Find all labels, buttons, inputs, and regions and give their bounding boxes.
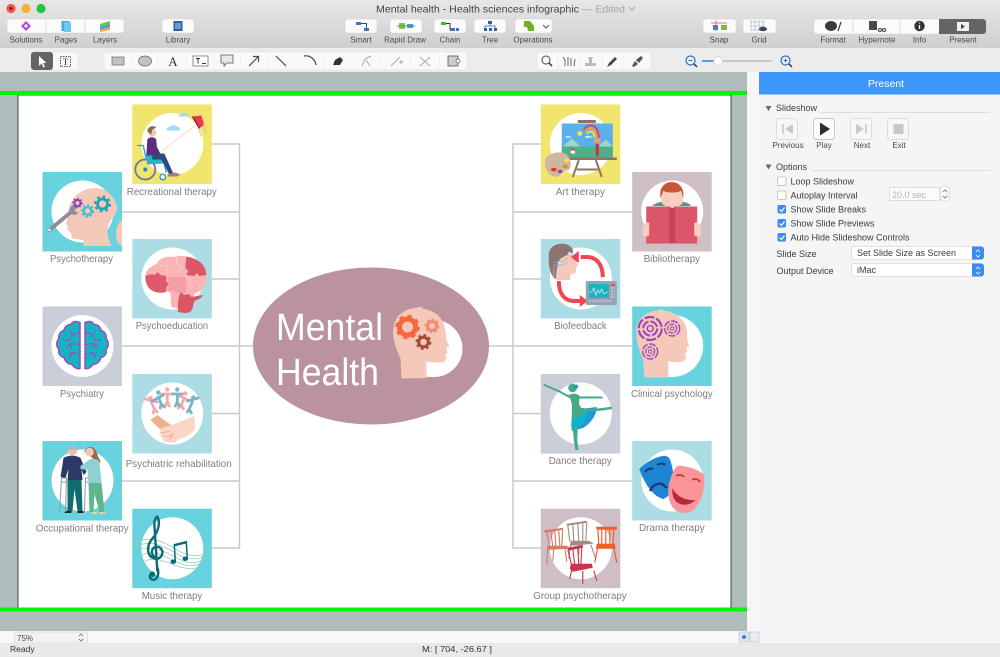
view tools (537, 52, 651, 70)
checkboxes: Show Slide Previews (790, 218, 875, 228)
toolbar buttons: diagram tools: Tree (482, 36, 499, 44)
toolbar buttons: snap and grid (703, 19, 776, 44)
select: Output Device: Output Device (776, 266, 834, 276)
card: Music therapy (132, 509, 212, 602)
card: Psychiatry (42, 306, 122, 400)
card: Occupational therapy: Occupational therapy (36, 523, 129, 535)
section: Options (766, 162, 990, 276)
card: Drama therapy (632, 441, 712, 534)
section: Slideshow: Slideshow (776, 103, 818, 113)
card: Biofeedback (541, 239, 620, 332)
card: Bibliotherapy (632, 172, 712, 265)
card: Psychiatry: Psychiatry (60, 388, 105, 400)
card: Psychotherapy: Psychotherapy (50, 253, 114, 265)
heading: Mental Health: Mental (276, 307, 383, 349)
card: Group psychotherapy (533, 509, 627, 602)
card: Dance therapy: Dance therapy (549, 455, 612, 467)
window title: — Edited (582, 4, 625, 16)
toolbar group: solutions, pages, layers (7, 19, 124, 44)
slide page (0, 91, 747, 612)
checkboxes: Show Slide Breaks (790, 204, 867, 214)
card: Psychotherapy (42, 172, 122, 265)
canvas backdrop (0, 72, 747, 631)
button: Next: Next (854, 141, 871, 150)
toolbar group: solutions, pages, layers: Pages (55, 36, 77, 44)
toolbar group: format, hypernote, info, present: Present (949, 36, 978, 44)
toolbar group: format, hypernote, info, present: Hypernote (859, 36, 896, 44)
toolbar buttons: diagram tools: Chain (440, 36, 460, 44)
toolbar buttons: snap and grid: Grid (751, 36, 767, 44)
card: Occupational therapy (36, 441, 129, 535)
heading: Mental Health (276, 307, 383, 394)
window controls (6, 4, 46, 13)
button: Previous: Previous (772, 141, 804, 150)
card: Music therapy: Music therapy (142, 590, 203, 602)
status bar: Ready (10, 644, 35, 654)
card: Psychiatric rehabilitation (126, 374, 232, 470)
toolbar group: format, hypernote, info, present (814, 19, 986, 44)
panel header (759, 72, 1000, 94)
status bar (0, 643, 1000, 657)
card: Drama therapy: Drama therapy (639, 522, 705, 534)
toolbar button: library: Library (166, 36, 190, 44)
button: Previous (772, 118, 804, 150)
toolbar buttons: diagram tools: Rapid Draw (384, 36, 426, 44)
select: Slide Size: Set Slide Size as Screen (857, 248, 956, 258)
checkboxes (778, 176, 910, 242)
card: Biofeedback: Biofeedback (554, 320, 607, 332)
window title: Mental health - Health sciences infographic (376, 4, 579, 16)
card: Psychiatric rehabilitation: Psychiatric rehabilitation (126, 458, 232, 470)
heading: Mental Health: Health (276, 352, 379, 394)
toolbar buttons: diagram tools (345, 19, 553, 44)
interval field: 20.0 sec (892, 190, 927, 200)
shape tools (104, 52, 467, 70)
checkboxes: Autoplay Interval (790, 190, 858, 200)
connector lines: left (122, 144, 253, 548)
card: Psychoeducation: Psychoeducation (136, 320, 208, 332)
card: Dance therapy (541, 374, 620, 467)
toolbar group: solutions, pages, layers: Solutions (10, 36, 42, 44)
card: Recreational therapy (127, 104, 217, 198)
section: Options: Options (776, 162, 808, 172)
button: Exit: Exit (892, 141, 906, 150)
status bar: M: [ 704, -26.67 ] (422, 644, 492, 654)
interval field (890, 186, 949, 201)
toolbar group: solutions, pages, layers: Layers (93, 36, 117, 44)
checkboxes: Loop Slideshow (790, 176, 855, 186)
selection tools: T (63, 57, 69, 67)
icon: head with gears (393, 306, 462, 378)
panel header: Present (868, 78, 904, 90)
select: Slide Size: Slide Size (776, 249, 817, 259)
connector lines: right (489, 144, 632, 548)
select: Slide Size (776, 246, 984, 260)
card: Art therapy: Art therapy (556, 186, 606, 198)
card: Psychoeducation (132, 239, 212, 332)
central ellipse: Mental Health (253, 268, 489, 424)
toolbar buttons: diagram tools: Smart (350, 36, 372, 44)
card: Group psychotherapy: Group psychotherapy (533, 590, 627, 602)
card: Clinical psychology: Clinical psychology (631, 388, 713, 400)
zoom control bar (0, 631, 759, 643)
toolbar button: library (162, 19, 194, 44)
button: Exit (888, 118, 908, 150)
title bar and main toolbar (0, 0, 1000, 48)
select: Output Device: iMac (857, 265, 877, 275)
card: Recreational therapy: Recreational therapy (127, 186, 217, 198)
selection tools (31, 52, 78, 70)
button: Next (850, 118, 872, 150)
toolbar buttons: snap and grid: Snap (710, 36, 729, 44)
drawing tools toolbar (0, 48, 1000, 72)
toolbar buttons: diagram tools: Operations (513, 36, 553, 44)
shape tools: A (168, 54, 178, 69)
toolbar group: format, hypernote, info, present: Format (820, 36, 846, 44)
checkboxes: Auto Hide Slideshow Controls (790, 232, 910, 242)
button: Play: Play (816, 141, 832, 150)
section: Slideshow (766, 103, 990, 150)
side panel: Present (759, 72, 1000, 643)
button: Play (814, 118, 834, 150)
zoom slider (686, 56, 792, 67)
zoom control bar: 75% (17, 634, 33, 643)
card: Bibliotherapy: Bibliotherapy (644, 253, 701, 265)
toolbar group: format, hypernote, info, present: Info (913, 36, 927, 44)
card: Clinical psychology (631, 306, 713, 400)
card: Art therapy (541, 104, 620, 198)
select: Output Device (776, 264, 984, 276)
